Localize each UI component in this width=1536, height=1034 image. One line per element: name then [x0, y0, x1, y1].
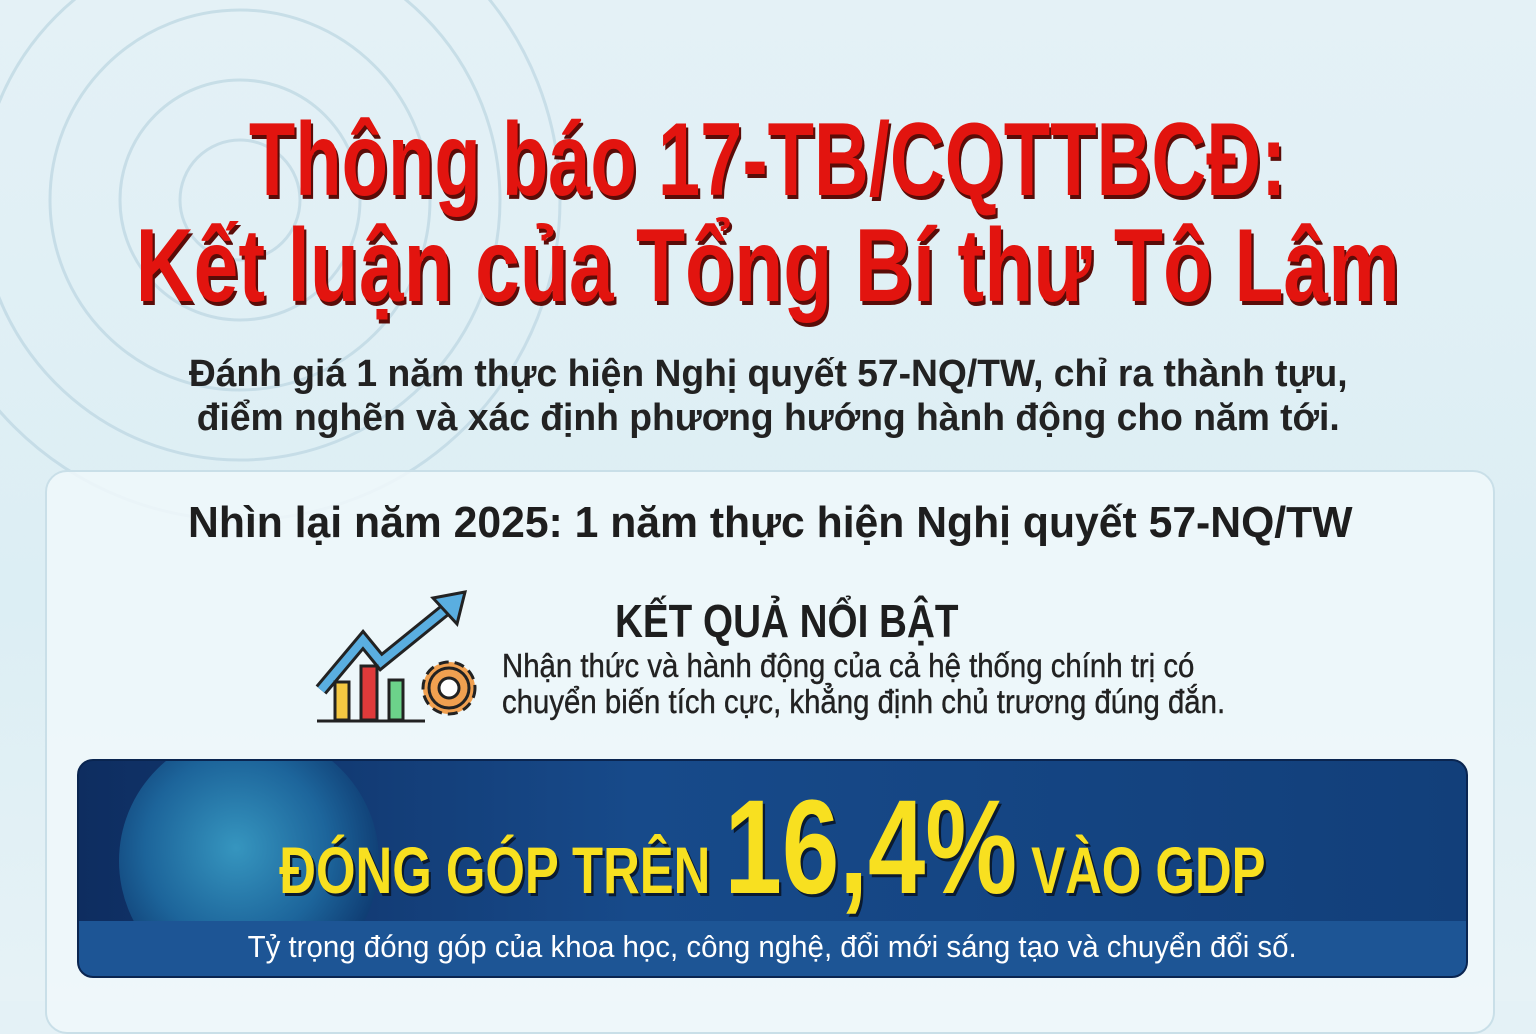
- stat caption: Tỷ trọng đóng góp của khoa học, công nghệ, đổi mới sáng tạo và chuyển đổi số.: [248, 929, 1297, 964]
- title: Kết luận của Tổng Bí thư Tô Lâm: [136, 208, 1400, 324]
- stat caption: [79, 921, 1466, 976]
- text: key results body: [502, 647, 1225, 720]
- text: key results body: Nhận thức và hành động của cả hệ thống chính trị có: [502, 647, 1194, 684]
- banner: GDP contribution: [77, 759, 1468, 978]
- title: Thông báo 17-TB/CQTTBCĐ:: [249, 102, 1287, 218]
- text: key results body: chuyển biến tích cực, khẳng định chủ trương đúng đắn.: [502, 683, 1225, 720]
- subtitle: điểm nghẽn và xác định phương hướng hành động cho năm tới.: [196, 397, 1339, 439]
- panel heading: Nhìn lại năm 2025: 1 năm thực hiện Nghị quyết 57-NQ/TW: [188, 498, 1352, 547]
- subtitle: Đánh giá 1 năm thực hiện Nghị quyết 57-NQ/TW, chỉ ra thành tựu,: [189, 353, 1347, 395]
- subtitle: [189, 353, 1347, 439]
- title: [136, 102, 1400, 327]
- icon: growth chart with gear: [316, 590, 476, 722]
- heading: key results: KẾT QUẢ NỔI BẬT: [615, 595, 958, 647]
- decorative drum pattern: [0, 0, 562, 470]
- icon: globe: [119, 731, 379, 991]
- stat headline: ĐÓNG GÓP TRÊN 16,4% VÀO GDP: [279, 773, 1266, 922]
- panel: review 2025: [45, 470, 1495, 1034]
